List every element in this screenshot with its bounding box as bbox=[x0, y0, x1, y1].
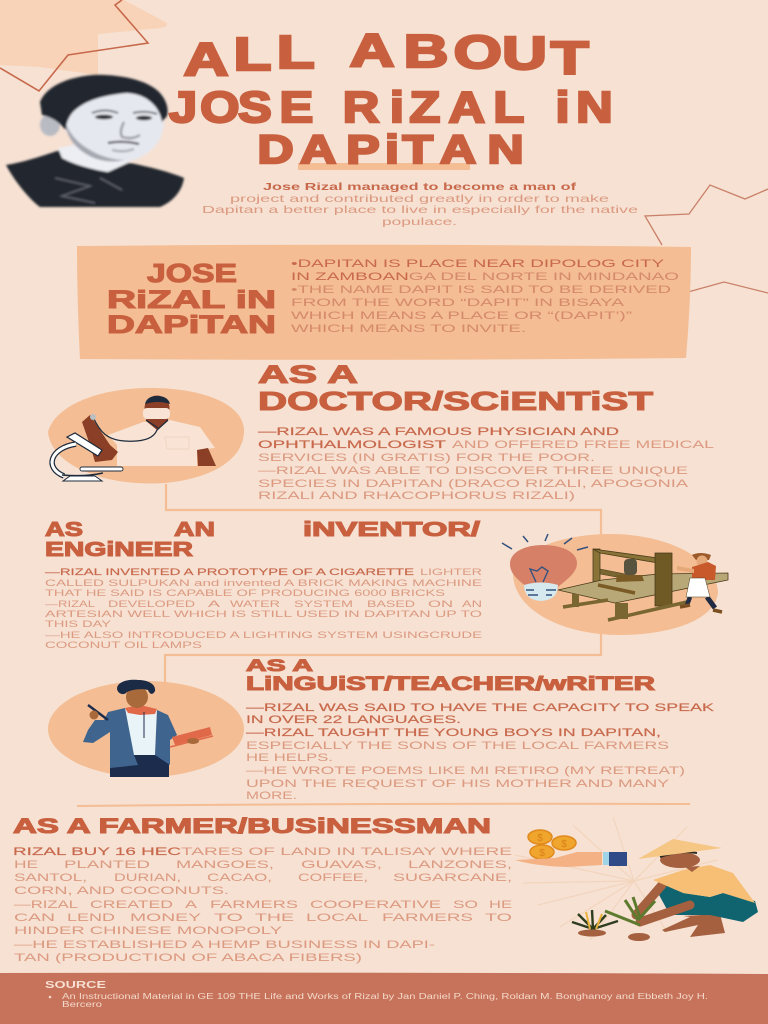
section text: inventor: LIGHTER bbox=[420, 567, 483, 577]
intro paragraph: project and contributed greatly in order to make bbox=[230, 193, 609, 205]
section text: inventor: THAT HE SAID IS CAPABLE OF PRODUCING 6000 BRICKS bbox=[45, 588, 445, 598]
section text: inventor: WATER bbox=[230, 599, 281, 609]
section text: doctor: SERVICES (IN GRATIS) FOR THE POOR. bbox=[258, 452, 595, 464]
section text: inventor: BASED bbox=[367, 599, 416, 609]
section text: doctor: AND OFFERED FREE MEDICAL bbox=[452, 439, 714, 451]
section heading: doctor: AS A bbox=[258, 361, 358, 389]
panel heading: JOSE bbox=[147, 258, 237, 288]
panel text: •THE NAME DAPIT IS SAID TO BE DERIVED bbox=[291, 284, 671, 296]
section heading: inventor: AN bbox=[174, 519, 215, 541]
section: doctor illustration bbox=[48, 388, 244, 484]
section heading: doctor bbox=[258, 361, 653, 416]
section text: linguist: MORE. bbox=[246, 790, 297, 802]
section text: linguist: HE HELPS. bbox=[246, 752, 333, 764]
section text: farmer: SUGARCANE, bbox=[393, 872, 512, 884]
section text: farmer: CORN, AND COCONUTS. bbox=[14, 885, 229, 897]
panel text: WHICH MEANS A PLACE OR “(DAPIT’)” bbox=[291, 310, 632, 322]
illustration: brick press and worker bbox=[558, 549, 728, 620]
section text: farmer: COOPERATIVE bbox=[310, 899, 441, 911]
source text: An Instructional Material in GE 109 THE Life and Works of Rizal by Jan Daniel P. Ching, Roldan M. Bonghanoy and Ebbeth Joy H. bbox=[62, 992, 708, 1001]
section text: farmer: COFFEE, bbox=[298, 872, 368, 884]
panel text: WHICH MEANS TO INVITE. bbox=[291, 323, 526, 335]
section text: linguist: ESPECIALLY THE SONS OF THE LOCAL FARMERS bbox=[246, 740, 669, 752]
section text: inventor: ON bbox=[428, 599, 453, 609]
section text: linguist bbox=[246, 702, 715, 802]
section text: doctor: RIZALI AND RHACOPHORUS RIZALI) bbox=[258, 490, 575, 502]
section text: inventor: THIS DAY bbox=[45, 619, 111, 629]
section heading: doctor: DOCTOR/SCiENTiST bbox=[258, 386, 653, 416]
icon: giving hand bbox=[515, 852, 627, 867]
section text: inventor: —RIZAL INVENTED A PROTOTYPE OF A CIGARETTE bbox=[45, 567, 414, 577]
section text: farmer: HINDER CHINESE MONOPOLY bbox=[14, 925, 282, 937]
panel text: •DAPITAN IS PLACE NEAR DIPOLOG CITY bbox=[291, 258, 665, 270]
section text: doctor: SPECIES IN DAPITAN (DRACO RIZALI, APOGONIA bbox=[258, 478, 689, 490]
section text: farmer bbox=[13, 846, 512, 964]
section text: inventor: CALLED SULPUKAN and invented A BRICK MAKING MACHINE bbox=[45, 578, 482, 588]
source text: Bercero bbox=[62, 1000, 103, 1009]
section heading: inventor: iNVENTOR/ bbox=[303, 519, 481, 541]
section text: farmer: LANZONES, bbox=[408, 859, 512, 871]
decorative corner blob bbox=[0, 0, 167, 75]
section text: farmer: FARMERS bbox=[210, 899, 298, 911]
footer band bbox=[0, 973, 768, 1024]
section text: farmer: SO bbox=[453, 899, 478, 911]
icon: coins bbox=[528, 830, 576, 859]
section text: farmer: TO bbox=[214, 912, 243, 924]
section text: linguist: —HE WROTE POEMS LIKE MI RETIRO (MY RETREAT) bbox=[246, 765, 685, 777]
section text: farmer: MANGOES, bbox=[176, 859, 274, 871]
section text: farmer: PLANTED bbox=[64, 859, 150, 871]
section: inventor illustration bbox=[502, 534, 728, 635]
section text: doctor bbox=[258, 426, 714, 502]
intro paragraph: Jose Rizal managed to become a man of bbox=[263, 181, 577, 193]
section text: farmer: DURIAN, bbox=[114, 872, 181, 884]
panel text: FROM THE WORD “DAPIT” IN BISAYA bbox=[291, 297, 625, 309]
panel text bbox=[291, 258, 679, 335]
section text: farmer: HE bbox=[14, 859, 38, 871]
section text: linguist: UPON THE REQUEST OF HIS MOTHER AND MANY bbox=[246, 778, 669, 790]
section text: farmer: RIZAL BUY 16 HEC bbox=[13, 846, 181, 858]
section heading: linguist: AS A bbox=[246, 656, 313, 675]
section text: farmer: CACAO, bbox=[207, 872, 272, 884]
source text bbox=[49, 992, 708, 1009]
section heading: inventor: ENGiNEER bbox=[45, 539, 194, 561]
section text: linguist: —RIZAL TAUGHT THE YOUNG BOYS IN DAPITAN, bbox=[246, 727, 661, 739]
section text: inventor bbox=[45, 567, 483, 650]
section text: farmer: —HE ESTABLISHED A HEMP BUSINESS IN DAPI- bbox=[14, 939, 436, 951]
section text: farmer: MONEY bbox=[130, 912, 201, 924]
zigzag line top left bbox=[0, 0, 148, 91]
section text: inventor: AN bbox=[462, 599, 482, 609]
title underline bbox=[298, 163, 470, 170]
title: DAPiTAN bbox=[258, 127, 524, 172]
section text: inventor: DEVELOPED bbox=[108, 599, 196, 609]
section text: inventor: COCONUT OIL LAMPS bbox=[45, 640, 202, 650]
section heading: farmer: AS A FARMER/BUSiNESSMAN bbox=[13, 815, 491, 838]
section text: linguist: IN OVER 22 LANGUAGES. bbox=[246, 714, 461, 726]
section text: inventor: —HE ALSO INTRODUCED A LIGHTING SYSTEM USINGCRUDE bbox=[45, 630, 482, 640]
section text: farmer: LEND bbox=[67, 912, 115, 924]
section text: farmer: A bbox=[185, 899, 198, 911]
section text: farmer: HE bbox=[489, 899, 512, 911]
section text: farmer: CAN bbox=[14, 912, 55, 924]
section text: farmer: TO bbox=[485, 912, 512, 924]
source heading: SOURCE bbox=[45, 980, 106, 991]
icon: light bulb bbox=[502, 534, 588, 601]
panel heading bbox=[107, 258, 276, 339]
section text: inventor: —RIZAL bbox=[45, 599, 95, 609]
section text: doctor: OPHTHALMOLOGIST bbox=[258, 439, 447, 451]
section text: doctor: —RIZAL WAS A FAMOUS PHYSICIAN AND bbox=[258, 426, 619, 438]
section text: farmer: THE bbox=[255, 912, 294, 924]
section text: inventor: ARTESIAN WELL WHICH IS STILL USED IN DAPITAN UP TO bbox=[45, 609, 482, 619]
section heading: inventor bbox=[45, 519, 481, 561]
zigzag line right bbox=[645, 185, 768, 293]
icon: seedlings bbox=[572, 897, 655, 941]
title: ALL ABOUT bbox=[184, 25, 589, 85]
panel: Jose Rizal in Dapitan bbox=[77, 245, 691, 360]
section text: farmer: SANTOL, bbox=[14, 872, 87, 884]
connector lines bbox=[165, 484, 601, 682]
intro paragraph: populace. bbox=[382, 216, 457, 228]
icon: coins: $ bbox=[561, 839, 567, 850]
section text: doctor: —RIZAL WAS ABLE TO DISCOVER THREE UNIQUE bbox=[258, 465, 688, 477]
divider bbox=[77, 804, 690, 806]
section text: farmer: CREATED bbox=[90, 899, 173, 911]
portrait of Jose Rizal bbox=[6, 75, 184, 207]
section text: farmer: TARES OF LAND IN TALISAY WHERE bbox=[181, 846, 512, 858]
section text: inventor: SYSTEM bbox=[294, 599, 353, 609]
section text: inventor: A bbox=[208, 599, 220, 609]
panel heading: RiZAL iN bbox=[107, 286, 276, 314]
section: farmer illustration bbox=[515, 817, 758, 941]
title bbox=[169, 25, 613, 172]
section heading: linguist: LiNGUiST/TEACHER/wRiTER bbox=[246, 674, 655, 695]
panel text: IN ZAMBOAN GA DEL NORTE IN MINDANAO bbox=[291, 271, 679, 283]
icon: coins: $ bbox=[539, 848, 545, 859]
section text: farmer: FARMERS bbox=[382, 912, 473, 924]
section text: linguist: —RIZAL WAS SAID TO HAVE THE CAPACITY TO SPEAK bbox=[246, 702, 715, 714]
panel heading: DAPiTAN bbox=[107, 311, 276, 339]
section: teacher illustration bbox=[48, 680, 244, 777]
section heading: linguist bbox=[246, 656, 655, 695]
section text: farmer: TAN (PRODUCTION OF ABACA FIBERS) bbox=[14, 952, 362, 964]
intro paragraph: Dapitan a better place to live in especially for the native bbox=[202, 204, 638, 216]
icon: coins: $ bbox=[537, 833, 543, 844]
section text: farmer: GUAVAS, bbox=[301, 859, 382, 871]
section text: farmer: LOCAL bbox=[306, 912, 368, 924]
intro paragraph bbox=[202, 181, 638, 228]
section text: farmer: —RIZAL bbox=[14, 899, 78, 911]
title: JOSE RiZAL iN bbox=[169, 83, 613, 132]
section heading: inventor: AS bbox=[45, 519, 83, 541]
